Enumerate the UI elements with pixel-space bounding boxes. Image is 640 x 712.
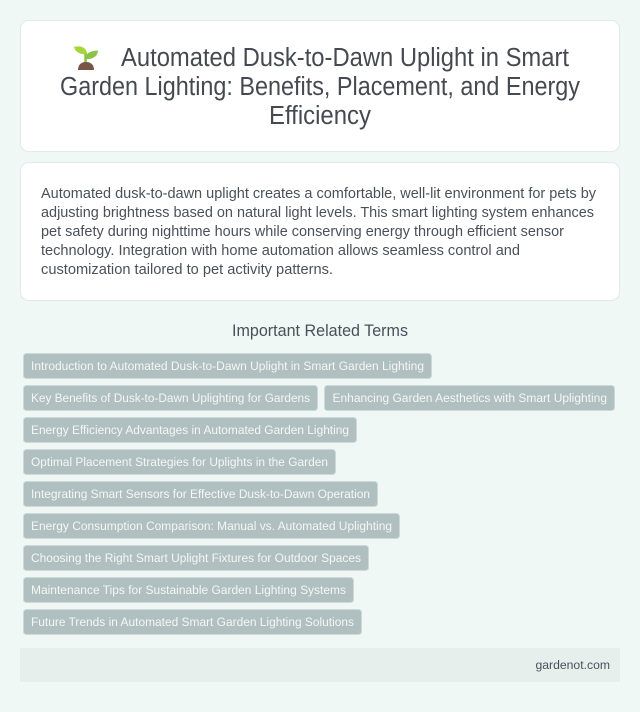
heading: important related terms: Important Related Terms	[232, 322, 408, 340]
title text: Garden Lighting: Benefits, Placement, and Energy	[60, 73, 580, 101]
footer source text: gardenot.com	[536, 658, 610, 672]
tag: energy efficiency	[24, 418, 356, 442]
tag: key benefits: Key Benefits of Dusk-to-Dawn Uplighting for Gardens	[31, 391, 310, 405]
summary text: technology. Integration with home automation allows seamless control and	[41, 243, 520, 259]
title text	[60, 44, 580, 130]
tag: placement	[24, 450, 336, 474]
tag: introduction	[24, 354, 432, 378]
title text: Automated Dusk-to-Dawn Uplight in Smart	[121, 44, 569, 72]
summary text: Automated dusk-to-dawn uplight creates a comfortable, well-lit environment for pets by	[41, 186, 597, 202]
panel: title card	[20, 20, 620, 152]
tag: energy consumption: Energy Consumption Comparison: Manual vs. Automated Uplighting	[31, 519, 392, 533]
panel: footer	[20, 648, 620, 682]
tag: fixtures: Choosing the Right Smart Uplight Fixtures for Outdoor Spaces	[31, 551, 361, 565]
tag: smart sensors: Integrating Smart Sensors for Effective Dusk-to-Dawn Operation	[31, 487, 370, 501]
tag: smart sensors	[24, 482, 378, 506]
tag: maintenance	[24, 578, 354, 602]
panel: summary card	[20, 162, 620, 300]
icon: seedling	[74, 46, 98, 70]
title text: Efficiency	[269, 102, 371, 130]
tag: key benefits	[24, 386, 318, 410]
tag: maintenance: Maintenance Tips for Sustainable Garden Lighting Systems	[31, 583, 346, 597]
tag: energy consumption	[24, 514, 400, 538]
tag: introduction: Introduction to Automated Dusk-to-Dawn Uplight in Smart Garden Lighting	[31, 359, 424, 373]
tag: aesthetics: Enhancing Garden Aesthetics with Smart Uplighting	[332, 391, 607, 405]
tag: placement: Optimal Placement Strategies for Uplights in the Garden	[31, 455, 328, 469]
summary text: pet safety during nighttime hours while conserving energy through efficient sensor	[41, 224, 564, 240]
tag: future trends: Future Trends in Automated Smart Garden Lighting Solutions	[31, 615, 354, 629]
panel: related term tags	[24, 354, 614, 634]
summary text: adjusting brightness based on natural light levels. This smart lighting system enhances	[41, 205, 594, 221]
summary text	[41, 186, 597, 278]
tag: energy efficiency: Energy Efficiency Advantages in Automated Garden Lighting	[31, 423, 349, 437]
summary text: customization tailored to pet activity patterns.	[41, 262, 333, 278]
tag: aesthetics	[324, 386, 614, 410]
tag: fixtures	[24, 546, 368, 570]
tag: future trends	[24, 610, 362, 634]
